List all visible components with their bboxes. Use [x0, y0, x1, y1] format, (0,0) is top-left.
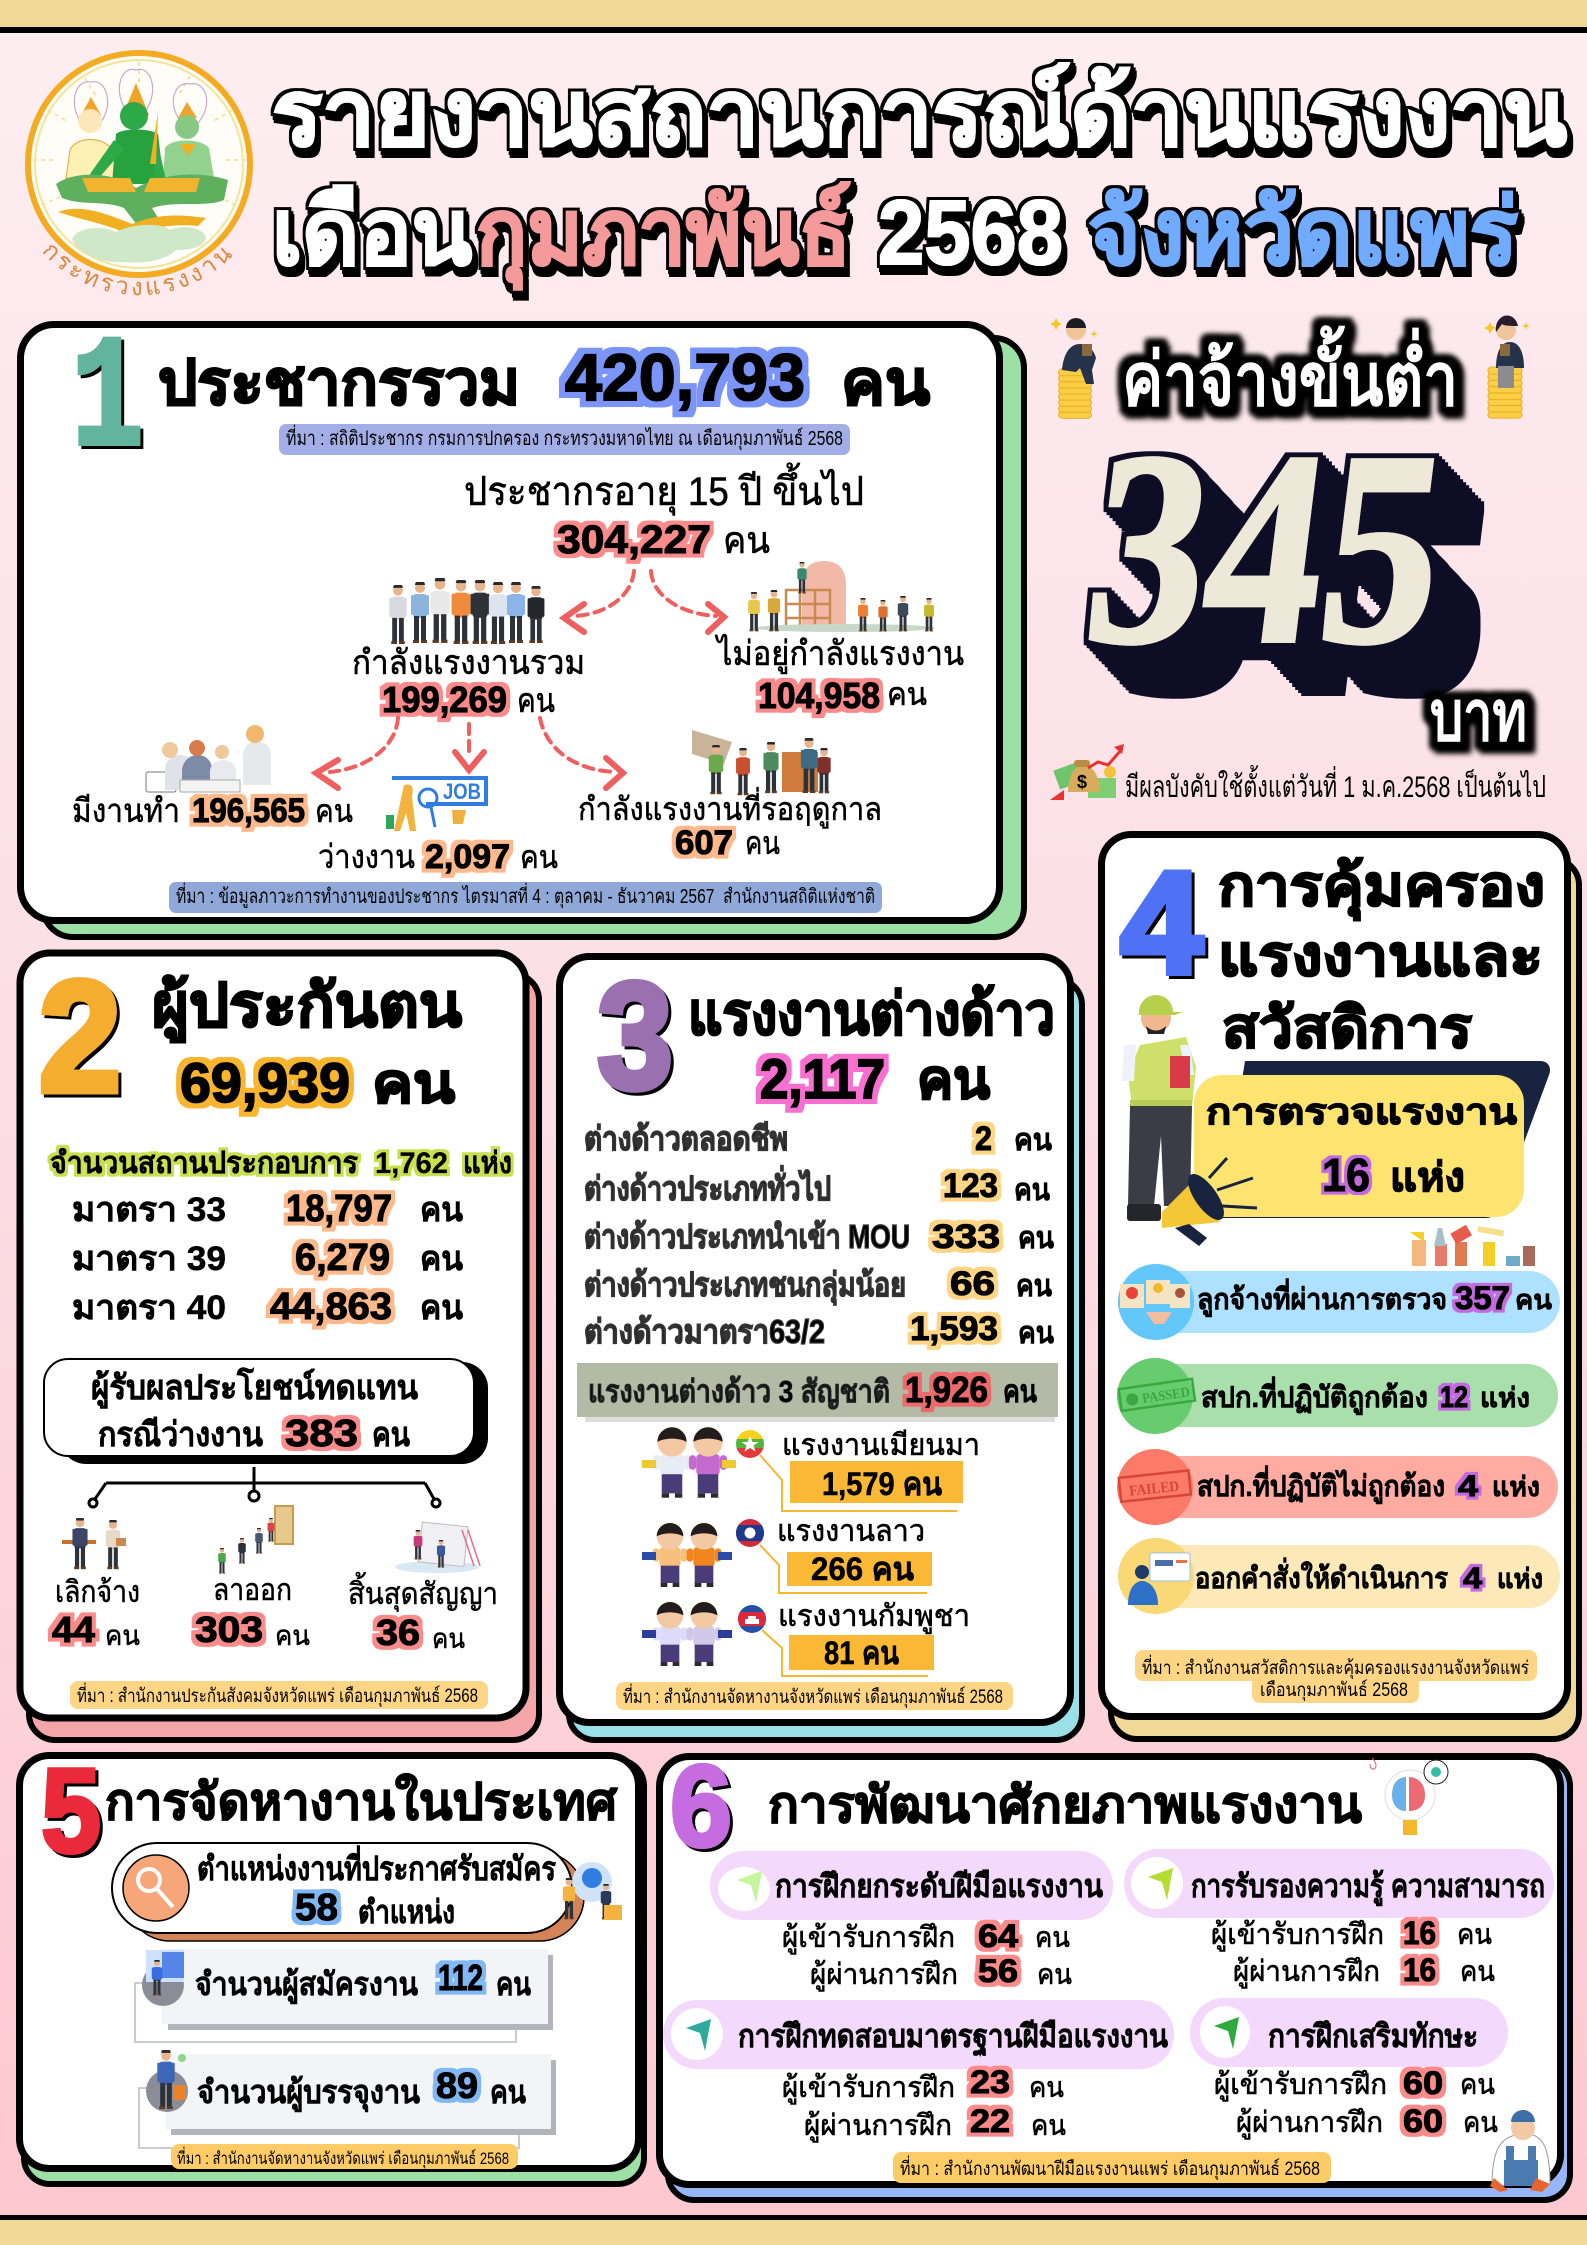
layoff label: 44 [52, 1609, 95, 1650]
row: lifetime: ต่างด้าวตลอดชีพ [584, 1120, 788, 1157]
pill: compliant: แห่ง [1480, 1383, 1530, 1413]
number 2: 2 [39, 949, 121, 1125]
insured number: 69,939 [180, 1051, 350, 1114]
wage number: 345 [1073, 395, 1460, 701]
icon: brain bulb [1370, 1758, 1448, 1835]
employed: มีงานทำ [72, 792, 180, 829]
myanmar count: 1,579 คน [822, 1466, 942, 1502]
icon: job search [386, 778, 486, 831]
source 1b: ที่มา : ข้อมูลภาวะการทำงานของประชากร ไตรมาสที่ 4 : ตุลาคม - ธันวาคม 2567 สำนักงานสถิติแห่งชาติ [176, 882, 875, 909]
number 5: 5 [41, 1744, 101, 1878]
group: skill standard test: ผู้ผ่านการฝึก [804, 2110, 952, 2143]
flag: myanmar [736, 1430, 764, 1458]
icon: cambodian workers [642, 1602, 732, 1666]
unemployed: คน [520, 839, 558, 875]
not in labour force number: 104,958 [758, 675, 880, 716]
group: competency certification: 16 [1403, 1915, 1436, 1951]
flag: cambodia [738, 1605, 766, 1633]
panel 2: insured persons [20, 949, 539, 1740]
row: minority: คน [1016, 1270, 1052, 1303]
employed: คน [315, 793, 353, 829]
arrows from labour force [316, 718, 623, 788]
top band [0, 0, 1587, 33]
resign label: 303 [195, 1609, 263, 1650]
icon: farmers [692, 730, 831, 795]
panel 5: domestic employment [20, 1744, 644, 2184]
laos count: 266 คน [811, 1551, 914, 1587]
section 33 row [72, 1188, 463, 1230]
icon: money bag [1050, 744, 1124, 800]
age 15 plus number: 304,227 [557, 518, 711, 562]
heading labour protection: สวัสดิการ [1222, 996, 1472, 1059]
labour force number: 199,269 [382, 679, 507, 720]
row: section 63/2: ต่างด้าวมาตรา63/2 [584, 1313, 825, 1350]
section 33 row: มาตรา 33 [72, 1191, 226, 1229]
icon: job search: JOB [443, 779, 481, 804]
placements box: จำนวนผู้บรรจุงาน [197, 2074, 420, 2113]
source 2 [70, 1681, 488, 1709]
group: skill level test: คน [1037, 1959, 1072, 1991]
group: skill upgrade [1190, 1998, 1508, 2140]
group: skill standard test: ผู้เข้ารับการฝึก [782, 2072, 955, 2105]
icon: inspector [1122, 995, 1196, 1221]
placements box [139, 2048, 556, 2148]
applicants box [135, 1949, 553, 2042]
foreign workers total: 2,117 [760, 1047, 885, 1110]
banner: three nationalities: แรงงานต่างด้าว 3 สัญชาติ [588, 1374, 890, 1410]
row: lifetime [584, 1120, 1052, 1158]
source 4 [1135, 1650, 1537, 1703]
pill: orders issued: แห่ง [1497, 1564, 1543, 1594]
icon: recruiter [563, 1862, 622, 1920]
unemployed: ว่างงาน [318, 838, 415, 875]
total population: 420,793 [565, 340, 805, 414]
placements box: คน [490, 2074, 526, 2110]
icon: placed worker [146, 2048, 188, 2112]
source 5 [171, 2144, 518, 2169]
applicants box: 112 [438, 1957, 483, 1998]
connector [89, 1467, 440, 1507]
number 1: 1 [71, 312, 144, 493]
contract end label: สิ้นสุดสัญญา [348, 1572, 498, 1613]
group: skill level test: ผู้ผ่านการฝึก [810, 1959, 958, 1992]
group: skill level test: การฝึกยกระดับฝีมือแรงงาน [775, 1868, 1103, 1904]
employed: 196,565 [192, 792, 305, 830]
pill: employees inspected [1118, 1264, 1560, 1340]
group: competency certification: ผู้เข้ารับการฝึก [1211, 1919, 1384, 1952]
resign label: คน [275, 1620, 310, 1651]
inspection callout [1194, 1061, 1550, 1218]
group: skill upgrade: 60 [1403, 2065, 1443, 2101]
section 40 row: คน [420, 1289, 463, 1327]
layoff label: เลิกจ้าง [55, 1576, 140, 1609]
cambodia count: 81 คน [824, 1635, 899, 1671]
inspection callout: การตรวจแรงงาน [1206, 1091, 1517, 1132]
unemployment benefit box: 383 [285, 1413, 358, 1455]
unit: คน [841, 349, 930, 418]
icon: businesswoman on coins [1484, 315, 1530, 418]
establishments: แห่ง [463, 1147, 512, 1180]
job vacancies pill: ตำแหน่งงานที่ประกาศรับสมัคร [197, 1845, 556, 1887]
heading labour protection: การคุ้มครอง [1218, 854, 1545, 921]
row: MOU: 333 [932, 1218, 1000, 1256]
panel 4: labour protection [1102, 834, 1579, 1739]
pill: non compliant: 4 [1458, 1470, 1478, 1503]
cambodia count [762, 1630, 934, 1676]
group: competency certification: คน [1457, 1919, 1492, 1951]
minimum wage block [1050, 315, 1546, 804]
labour force number: คน [517, 682, 555, 720]
row: general: 123 [943, 1167, 998, 1205]
source 2: ที่มา : สำนักงานประกันสังคมจังหวัดแพร่ เดือนกุมภาพันธ์ 2568 [77, 1682, 478, 1708]
pill: orders issued: 4 [1463, 1562, 1482, 1595]
labour force: กำลังแรงงานรวม [352, 644, 585, 682]
placements box: 89 [436, 2065, 478, 2106]
group: skill level test: 56 [978, 1953, 1018, 1989]
icon: myanmar workers [642, 1427, 736, 1498]
not in labour force: ไม่อยู่กำลังแรงงาน [714, 634, 964, 674]
inspection callout: 16 [1322, 1149, 1370, 1201]
unemployed: 2,097 [425, 838, 510, 876]
row: section 63/2: คน [1018, 1317, 1054, 1350]
unemployment benefit box: คน [372, 1416, 410, 1454]
source 1 [279, 424, 850, 455]
number 3: 3 [597, 951, 673, 1121]
group: skill standard test [663, 2000, 1174, 2143]
pill: orders issued: ออกคำสั่งให้ดำเนินการ [1195, 1557, 1448, 1595]
unemployment benefit box: ผู้รับผลประโยชน์ทดแทน [91, 1367, 418, 1409]
row: MOU: คน [1018, 1222, 1054, 1255]
section 39 row: คน [420, 1240, 463, 1278]
unemployed [318, 838, 558, 876]
banner: three nationalities [577, 1363, 1058, 1422]
source 1: ที่มา : สถิติประชากร กรมการปกครอง กระทรวงมหาดไทย ณ เดือนกุมภาพันธ์ 2568 [286, 424, 843, 451]
group: skill level test: ผู้เข้ารับการฝึก [782, 1922, 955, 1955]
laos count [760, 1545, 932, 1593]
group: skill upgrade: คน [1463, 2107, 1498, 2139]
icon: megaphone [1162, 1158, 1257, 1246]
group: skill standard test: การฝึกทดสอบมาตรฐานฝีมือแรงงาน [738, 2018, 1168, 2057]
applicants box: คน [496, 1966, 531, 2002]
source 4: เดือนกุมภาพันธ์ 2568 [1260, 1679, 1408, 1702]
icon: resign [218, 1506, 293, 1574]
icon: businessman on coins [1050, 318, 1098, 418]
flag: laos [736, 1519, 764, 1547]
unemployment benefit box: กรณีว่างงาน [98, 1416, 263, 1454]
insured number [180, 1051, 455, 1114]
icon: contract end [395, 1522, 480, 1573]
title [272, 62, 1567, 290]
group: skill level test: 64 [978, 1918, 1018, 1954]
pill: compliant: สปก.ที่ปฏิบัติถูกต้อง [1201, 1376, 1428, 1415]
row: minority: ต่างด้าวประเภทชนกลุ่มน้อย [584, 1266, 906, 1306]
number 6: 6 [670, 1741, 732, 1871]
group: competency certification: ผู้ผ่านการฝึก [1233, 1956, 1380, 1989]
contract end label: 36 [376, 1612, 420, 1653]
title line 2: เดือน [272, 182, 472, 284]
job vacancies pill: ตำแหน่ง [358, 1894, 455, 1930]
source 3: ที่มา : สำนักงานจัดหางานจังหวัดแพร่ เดือนกุมภาพันธ์ 2568 [623, 1683, 1003, 1709]
laos label: แรงงานลาว [777, 1515, 925, 1548]
pill: non compliant: แห่ง [1492, 1472, 1540, 1502]
pill: compliant [1117, 1358, 1558, 1434]
panel 3: foreign workers [560, 951, 1082, 1740]
bottom band [0, 2215, 1587, 2245]
seasonal labour number [675, 824, 780, 862]
pill: employees inspected: คน [1515, 1285, 1553, 1315]
cambodia label: แรงงานกัมพูชา [778, 1600, 970, 1634]
section 33 row: 18,797 [286, 1188, 392, 1230]
title line 2 [272, 181, 1518, 290]
source 6 [893, 2152, 1331, 2183]
group: skill upgrade: การฝึกเสริมทักษะ [1268, 2018, 1478, 2054]
icon: tool hands [1410, 1225, 1535, 1266]
age 15 plus: ประชากรอายุ 15 ปี ขึ้นไป [464, 462, 864, 516]
age 15 plus number: คน [723, 520, 770, 562]
employed [72, 792, 353, 830]
resign label: ลาออก [213, 1574, 292, 1607]
title line 2: 2568 [878, 182, 1063, 284]
source 6: ที่มา : สำนักงานพัฒนาฝีมือแรงงานแพร่ เดือนกุมภาพันธ์ 2568 [900, 2155, 1320, 2181]
logo: ministry of labour seal: กระทรวงแรงงาน [42, 245, 232, 296]
heading labour protection: แรงงานและ [1218, 924, 1543, 987]
title line 2: กุมภาพันธ์ [476, 181, 851, 290]
group: skill standard test: คน [1029, 2072, 1064, 2104]
heading domestic employment: การจัดหางานในประเทศ [105, 1773, 618, 1830]
icon: workers group [389, 576, 544, 644]
group: skill standard test: คน [1031, 2110, 1066, 2142]
pill: non compliant: FAILED [1129, 1479, 1180, 1500]
icon: money bag: $ [1077, 772, 1087, 792]
wage heading: ค่าจ้างขั้นต่ำ [1122, 325, 1458, 421]
row: lifetime: 2 [975, 1120, 992, 1158]
establishments: จำนวนสถานประกอบการ [50, 1147, 358, 1180]
group: skill upgrade: ผู้ผ่านการฝึก [1236, 2107, 1383, 2140]
job vacancies pill [112, 1843, 584, 1941]
title line 1: รายงานสถานการณ์ด้านแรงงาน [272, 62, 1567, 165]
section 39 row: 6,279 [295, 1237, 390, 1279]
group: skill level test [710, 1851, 1113, 1992]
icon: lao workers [642, 1523, 732, 1587]
pill: non compliant [1117, 1449, 1558, 1525]
myanmar count [760, 1455, 963, 1511]
group: competency certification: 16 [1403, 1952, 1436, 1988]
section 33 row: คน [420, 1191, 463, 1229]
icon: office team [146, 725, 271, 792]
job vacancies pill: 58 [295, 1887, 338, 1929]
foreign workers total [760, 1047, 990, 1110]
row: general: คน [1014, 1174, 1050, 1207]
row: minority: 66 [950, 1265, 995, 1303]
section 39 row [72, 1237, 463, 1279]
heading population: ประชากรรวม [158, 349, 520, 418]
group: skill standard test: 23 [970, 2064, 1010, 2100]
heading insured: ผู้ประกันตน [152, 972, 462, 1043]
section 40 row: 44,863 [270, 1286, 392, 1328]
panel 1: population [20, 312, 1024, 937]
layoff label: คน [105, 1620, 140, 1651]
group: skill upgrade: 60 [1403, 2103, 1443, 2139]
contract end label: คน [432, 1623, 465, 1654]
banner: three nationalities: 1,926 [905, 1369, 988, 1410]
group: skill upgrade: คน [1460, 2069, 1495, 2101]
banner: three nationalities: คน [1003, 1374, 1037, 1409]
row: general [584, 1165, 1050, 1207]
contract end label [348, 1572, 498, 1654]
group: competency certification [1124, 1849, 1554, 1989]
section 39 row: มาตรา 39 [72, 1240, 226, 1278]
seasonal labour: กำลังแรงงานที่รอฤดูกาล [578, 787, 882, 829]
resign label [195, 1574, 310, 1651]
pill: compliant: 12 [1440, 1381, 1468, 1414]
panel 6: skills development [660, 1741, 1570, 2200]
not in labour force number: คน [887, 676, 927, 712]
unemployment benefit box [44, 1359, 488, 1464]
section 40 row [72, 1286, 463, 1328]
pill: compliant: PASSED [1141, 1385, 1191, 1407]
applicants box: จำนวนผู้สมัครงาน [195, 1966, 418, 2005]
seasonal labour number: คน [745, 825, 780, 861]
layoff label [52, 1576, 140, 1651]
pill: employees inspected: ลูกจ้างที่ผ่านการตรวจ [1197, 1278, 1447, 1317]
icon: applicant [142, 1950, 184, 2006]
row: MOU: ต่างด้าวประเภทนำเข้า MOU [584, 1218, 910, 1255]
source 1b [169, 882, 882, 913]
inspection callout: แห่ง [1390, 1156, 1465, 1200]
insured number: คน [372, 1054, 455, 1114]
heading labour protection [1218, 854, 1545, 1059]
icon: construction site [748, 561, 935, 632]
number 4: 4 [1120, 841, 1203, 1004]
row: section 63/2 [584, 1310, 1054, 1350]
source 5: ที่มา : สำนักงานจัดหางานจังหวัดแพร่ เดือนกุมภาพันธ์ 2568 [177, 2146, 509, 2169]
section 40 row: มาตรา 40 [72, 1289, 226, 1327]
heading foreign workers: แรงงานต่างด้าว [688, 982, 1055, 1047]
title line 2: จังหวัดแพร่ [1088, 182, 1518, 284]
icon: mechanic [1490, 2110, 1550, 2192]
group: skill upgrade: ผู้เข้ารับการฝึก [1214, 2069, 1387, 2102]
pill: employees inspected: 357 [1455, 1280, 1510, 1316]
seasonal labour number: 607 [675, 824, 733, 862]
foreign workers total: คน [917, 1050, 990, 1110]
group: skill level test: คน [1035, 1922, 1070, 1954]
pill: non compliant: สปก.ที่ปฏิบัติไม่ถูกต้อง [1197, 1465, 1445, 1504]
icon: magnifier [123, 1855, 189, 1921]
age 15 plus number [557, 518, 770, 562]
myanmar label: แรงงานเมียนมา [782, 1429, 980, 1462]
unit baht: บาท [1430, 677, 1527, 755]
arrows from age 15 plus [564, 571, 724, 632]
logo: ministry of labour seal [25, 50, 253, 296]
heading skills development: การพัฒนาศักยภาพแรงงาน [768, 1777, 1362, 1833]
row: section 63/2: 1,593 [910, 1310, 998, 1348]
group: competency certification: คน [1460, 1956, 1495, 1988]
establishments: 1,762 [375, 1147, 448, 1180]
icon: layoff [62, 1516, 126, 1569]
group: skill standard test: 22 [970, 2103, 1010, 2139]
row: lifetime: คน [1014, 1124, 1052, 1157]
row: general: ต่างด้าวประเภททั่วไป [584, 1165, 831, 1207]
pill: orders issued [1118, 1538, 1560, 1614]
source 3 [616, 1682, 1013, 1710]
